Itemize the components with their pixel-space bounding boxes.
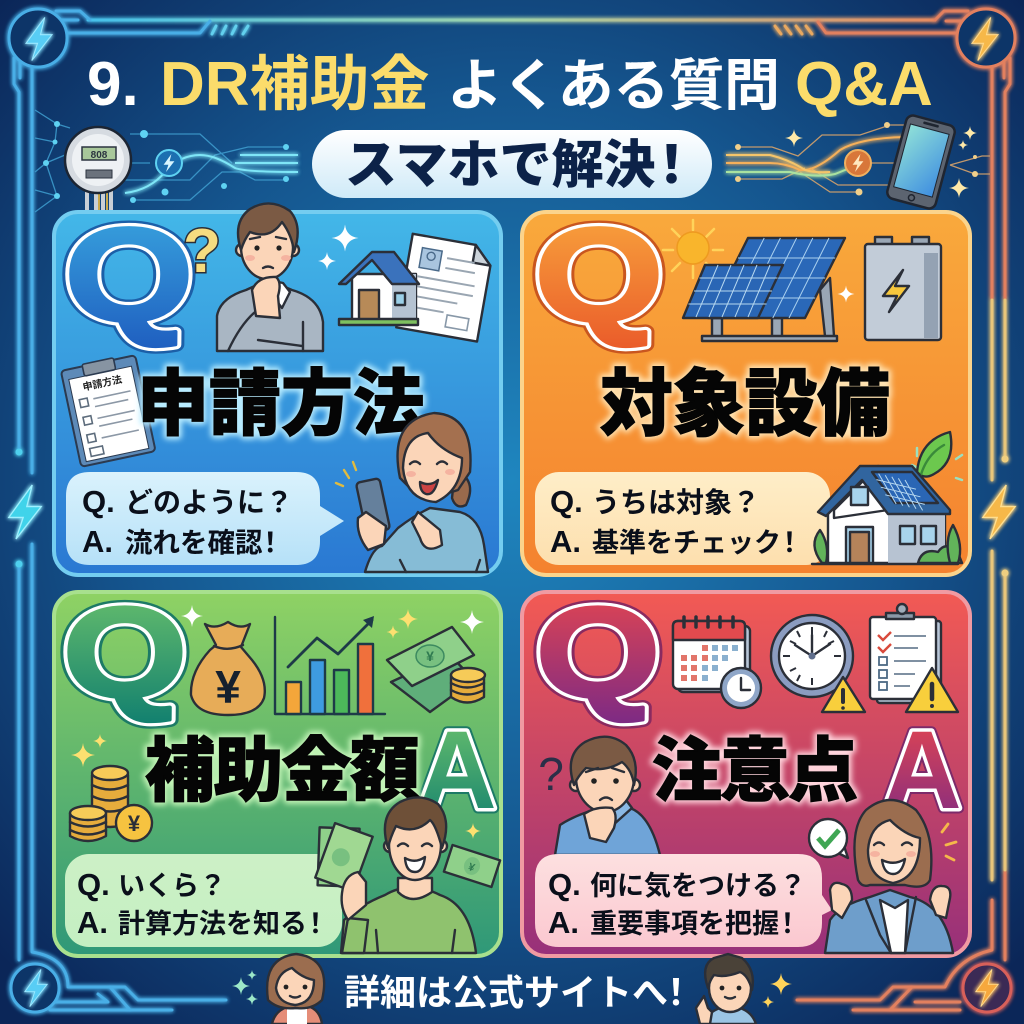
speech bubble: Q and A: Q.	[548, 867, 581, 902]
panel: 申請方法	[54, 200, 501, 575]
big letter Q: Q	[63, 581, 187, 724]
heading: 申請方法: 申請方法	[137, 345, 425, 450]
circuit: right	[726, 122, 990, 198]
big letter A: A	[882, 709, 962, 832]
icon: smart meter: 808	[91, 150, 108, 161]
big letter Q: Q	[536, 581, 660, 724]
sparkles	[71, 605, 484, 839]
big letter Q: Q	[534, 200, 664, 349]
speech bubble: Q and A: A.	[548, 905, 579, 940]
big letter Q: Q	[63, 581, 187, 724]
panel: 補助金額	[54, 581, 501, 956]
heading: 注意点: 注意点	[652, 715, 858, 816]
big letter A: A	[417, 709, 497, 832]
footer: right man pointing	[696, 954, 756, 1024]
big letter Q: Q	[534, 200, 664, 349]
speech bubble: Q and A: A.	[77, 905, 108, 940]
speech bubble: Q and A: A.	[82, 524, 113, 559]
icon: clock with warning	[771, 615, 865, 712]
heading: 対象設備: 対象設備	[600, 345, 890, 451]
title: DR補助金	[160, 36, 430, 123]
icon: clipboard with form: 申請方法	[81, 371, 123, 394]
person: woman with phone	[336, 413, 488, 572]
big letter A: A	[417, 709, 497, 832]
icon: calendar with clock	[673, 617, 761, 708]
panel: 注意点	[522, 581, 970, 956]
big letter Q: Q	[64, 200, 194, 349]
icon: yen money bag	[191, 622, 265, 715]
big letter Q: Q	[536, 581, 660, 724]
person: worried man	[555, 737, 660, 855]
bar chart	[275, 616, 385, 714]
big letter Q: Q	[534, 200, 664, 349]
speech bubble: Q and A	[535, 854, 832, 947]
icon: check speech bubble	[809, 819, 848, 858]
person: smiling woman in blazer	[825, 800, 956, 953]
icon: coin stack with yen coin	[70, 766, 152, 841]
speech bubble: Q and A: いくら？	[118, 864, 226, 903]
speech bubble: Q and A: 何に気をつける？	[590, 864, 806, 903]
icon: house	[339, 252, 419, 325]
person: thinking man	[217, 203, 323, 351]
icon: smartphone	[886, 114, 956, 210]
icon: solar panels	[683, 238, 845, 341]
subtitle pill: スマホで解決！	[345, 123, 697, 198]
big letter Q: Q	[536, 581, 660, 724]
speech bubble: Q and A	[66, 472, 344, 565]
big letter A: A	[882, 709, 962, 832]
title: 9.	[87, 50, 139, 119]
speech bubble: Q and A: 基準をチェック！	[592, 521, 803, 560]
heading: 注意点: 注意点	[652, 715, 858, 816]
footer: right sparkles	[762, 973, 792, 1008]
speech bubble: Q and A: Q.	[550, 484, 583, 519]
big letter A: A	[882, 709, 962, 832]
big letter Q: Q	[64, 200, 194, 349]
icon: coin stack with yen coin: ¥	[128, 811, 141, 836]
speech bubble: Q and A: 流れを確認！	[125, 520, 284, 560]
icon: smart meter	[65, 127, 131, 212]
icon: house with solar roof and leaf	[812, 432, 962, 564]
sparkle	[838, 286, 854, 302]
icon: banknotes and coins: ¥	[426, 648, 434, 664]
title	[87, 36, 933, 123]
circuit frame: right and bottom orange	[775, 9, 1015, 1012]
icon: application document	[396, 234, 494, 342]
question mark: ?	[538, 748, 564, 800]
speech bubble: Q and A: うちは対象？	[592, 481, 760, 521]
icon: flying banknote	[444, 845, 500, 887]
footer: left sparkles	[232, 970, 258, 1005]
speech bubble: Q and A: 重要事項を把握！	[590, 902, 801, 941]
icon: clipboard with form	[60, 353, 156, 467]
big letter Q: Q	[64, 200, 194, 349]
speech bubble: Q and A	[65, 854, 342, 947]
title: Q&A	[795, 50, 933, 119]
icon: checklist with warning	[870, 604, 958, 712]
panel: 対象設備	[522, 200, 970, 575]
big letter Q: Q	[63, 581, 187, 724]
icon: flying banknote: ¥	[467, 861, 477, 875]
footer: left woman	[267, 954, 324, 1024]
icon: yen money bag: ¥	[215, 661, 241, 713]
footer text: 詳細は公式サイトへ！	[344, 964, 694, 1016]
speech bubble: Q and A: どのように？	[125, 481, 293, 521]
icon: sun	[663, 220, 723, 278]
speech bubble: Q and A: Q.	[77, 867, 110, 902]
question mark: ?	[183, 217, 221, 286]
heading: 申請方法: 申請方法	[137, 345, 425, 450]
title: よくある質問	[447, 41, 780, 122]
speech bubble: Q and A	[535, 472, 830, 565]
speech bubble: Q and A: 計算方法を知る！	[118, 902, 329, 941]
heading: 補助金額: 補助金額	[145, 715, 420, 816]
heading: 対象設備: 対象設備	[600, 345, 890, 451]
sparkles	[318, 224, 358, 270]
big letter A: A	[417, 709, 497, 832]
heading: 補助金額: 補助金額	[145, 715, 420, 816]
icon: battery	[865, 237, 941, 340]
speech bubble: Q and A: Q.	[82, 484, 115, 519]
person: man holding money	[299, 797, 476, 953]
speech bubble: Q and A: A.	[550, 524, 581, 559]
icon: banknotes and coins	[387, 627, 485, 712]
circuit: left with smart meter	[35, 110, 298, 212]
